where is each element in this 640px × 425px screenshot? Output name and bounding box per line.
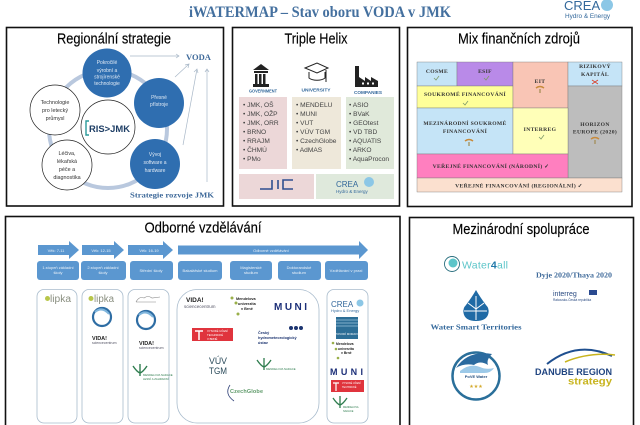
column: higher education: sciencecentrum: [184, 304, 216, 309]
column: higher education: TGM: [209, 366, 227, 376]
label: COMPANIES: COMPANIES: [354, 90, 383, 96]
list: companies: • AquaProcon: [349, 156, 389, 163]
arrows: age groups: Odborné vzdělávání: [253, 248, 290, 253]
icon: factory: [355, 66, 378, 87]
boxes: study levels: školy: [53, 270, 63, 275]
logo: PoVE Water: [452, 352, 500, 400]
arrows to VODA: [130, 54, 209, 182]
funding labels: COSME: [426, 69, 448, 75]
column: 7-11: [37, 290, 77, 423]
circle: Vývoj software a hardware: software a: [143, 160, 167, 166]
label: VODA: VODA: [186, 52, 212, 62]
list: university: • CzechGlobe: [296, 138, 337, 145]
circle: Vývoj software a hardware: [130, 139, 180, 189]
circle: Léčiva, lékařská péče a diagnostika: lékařská: [57, 159, 77, 165]
column: 7-11: lipka: [50, 294, 71, 305]
column: practice: Hydro & Energy: [331, 308, 359, 313]
funding labels: ESIF: [478, 69, 492, 75]
circle: RIS JMK: [81, 100, 135, 154]
funding labels: FINANCOVÁNÍ: [443, 127, 487, 135]
list: university: [292, 97, 341, 169]
logo: PoVE Water: PoVE Water: [465, 374, 488, 379]
column: practice: univerzita: [338, 347, 354, 351]
circle: Vývoj software a hardware: Vývoj: [149, 152, 161, 158]
arrows: age groups: Věk: 16-19: [139, 248, 159, 253]
column: higher education: Český: [258, 330, 270, 335]
column: practice: MUNI: [330, 367, 363, 377]
circle: Léčiva, lékařská péče a diagnostika: Léčiva,: [58, 151, 76, 157]
circle: Pokročilé výrobní a strojírenské technologie: strojírenské: [94, 74, 120, 80]
boxes: study levels: Vzdělávání v praxi: [330, 268, 362, 273]
logo: CREA Hydro & Energy: [564, 0, 613, 20]
logo: PoVE Water: ★★★: [469, 384, 483, 390]
logo box: JIC: [239, 174, 314, 199]
label: Strategie rozvoje JMK: Strategie rozvoje JMK: [130, 192, 214, 200]
column: 16-19: VIDA!: [139, 341, 154, 347]
circle: Pokročilé výrobní a strojírenské technologie: technologie: [94, 81, 120, 87]
panel: Mix finančních zdrojů: [408, 28, 632, 206]
circle: Přesné přístroje: [134, 78, 184, 128]
column: practice: VYSOKÉ UČENÍ: [342, 382, 361, 385]
column: higher education: MUNI: [274, 302, 307, 313]
logo: Danube Region Strategy: DANUBE REGION: [535, 367, 612, 377]
icon: government building: [253, 64, 269, 87]
list: government: • BRNO: [243, 129, 266, 136]
column: higher education: MENDELOVA NADACE: [266, 367, 296, 371]
column: 16-19: MENDELOVA NADACE: [143, 373, 173, 377]
logo box: CREA: CREA: [336, 180, 359, 189]
logo: Interreg: interreg: [553, 291, 577, 298]
column: practice: NADACE: [343, 410, 354, 413]
list: government: • PMo: [243, 156, 261, 163]
boxes: study levels: 1.stupeň základní: [42, 265, 75, 270]
label: Dyje 2020/Thaya 2020: Dyje 2020/Thaya 2020: [536, 272, 612, 280]
list: government: • JMK, OŽP: [243, 109, 278, 118]
list: companies: • AQUATIS: [349, 138, 382, 145]
boxes: study levels: studium: [244, 270, 259, 275]
circle: Technologie pro letecký průmysl: průmysl: [46, 115, 64, 122]
circle: Přesné přístroje: přístroje: [150, 102, 168, 108]
column: 16-19: [128, 290, 173, 423]
list: companies: • GEOtest: [349, 120, 379, 127]
logo: Danube Region Strategy: strategy: [568, 376, 612, 388]
column: higher education: ústav: [258, 341, 269, 345]
circle: Vývoj software a hardware: hardware: [145, 168, 166, 174]
funding mix grid: [417, 62, 622, 192]
list: companies: • VD TBD: [349, 129, 377, 136]
logo: Water Smart Territories: Water Smart Territories: [430, 322, 522, 332]
column: higher education: V BRNĚ: [207, 336, 218, 341]
logo box: CREA: Hydro & Energy: [336, 189, 369, 194]
logo: Water4all: Water4all: [462, 260, 508, 272]
column: higher education: [177, 290, 319, 423]
column: practice: MENDELOVA: [343, 406, 359, 409]
column: higher education: VYSOKÉ UČENÍ: [207, 328, 228, 333]
list: university: • VÚV TGM: [296, 127, 330, 136]
circle: Technologie pro letecký průmysl: [30, 85, 80, 135]
title: iWATERMAP – Stav oboru VODA v JMK: [189, 4, 451, 21]
funding labels: EIT: [535, 79, 545, 85]
funding labels: SOUKROMÉ FINANCOVÁNÍ: [424, 90, 506, 98]
arrows: age groups: Věk: 12-15: [91, 248, 111, 253]
list: government: • ČHMÚ: [243, 145, 267, 154]
funding labels: EUROPE (2020): [573, 128, 617, 136]
heading: Regionální strategie: [57, 30, 171, 48]
column: practice: TECHNICKÉ: [342, 386, 357, 389]
column: higher education: Mendelova: [236, 297, 257, 301]
column: higher education: v Brně: [241, 307, 253, 311]
panel: Mezinárodní spolupráce: [410, 218, 634, 425]
logo: Interreg: Rakousko-Česká republika: [553, 297, 591, 302]
boxes: study levels: Magisterské: [240, 265, 263, 270]
circle: Léčiva, lékařská péče a diagnostika: diagnostika: [53, 175, 81, 181]
boxes: study levels: [37, 261, 368, 280]
status marks: [434, 76, 599, 146]
column: higher education: univerzita: [238, 302, 257, 306]
panel: Triple Helix: [232, 28, 400, 206]
funding labels: [423, 62, 617, 190]
list: government: [239, 97, 287, 169]
boxes: study levels: školy: [98, 270, 108, 275]
column: practice: v Brně: [341, 351, 352, 355]
list: government: • JMK, ORR: [243, 120, 279, 127]
column: higher education: VIDA!: [186, 297, 204, 304]
circle: Technologie pro letecký průmysl: Technologie: [41, 100, 69, 106]
column: higher education: TECHNICKÉ: [207, 332, 223, 337]
logo: Water Smart Territories: [430, 290, 522, 332]
funding labels: KAPITÁL: [581, 70, 609, 78]
column: practice: POVODÍ MORAVY: [335, 332, 359, 336]
panel: Odborné vzdělávání: [6, 216, 400, 425]
column: 12-15: [82, 290, 123, 423]
list: companies: • ARKO: [349, 147, 371, 154]
column: practice: CREA: [331, 300, 354, 309]
circle: Technologie pro letecký průmysl: pro letecký: [42, 108, 68, 114]
arrows: age groups: [38, 241, 368, 259]
funding labels: HORIZON: [580, 122, 610, 128]
icon: graduation cap: [305, 63, 328, 82]
funding labels: VEŘEJNÉ FINANCOVÁNÍ (NÁRODNÍ) ✓: [433, 162, 549, 170]
logo box: JIC: JIC: [275, 195, 277, 197]
logo box: CREA: [316, 174, 394, 199]
logo: Water4all: [444, 256, 508, 272]
panel: Regionální strategie: [6, 28, 224, 206]
column: 12-15: VIDA!: [92, 336, 107, 342]
heading: Mix finančních zdrojů: [458, 30, 580, 48]
heading: Odborné vzdělávání: [144, 220, 262, 236]
logo: Danube Region Strategy: [535, 350, 615, 388]
list: companies: [346, 97, 394, 169]
circle: Přesné přístroje: Přesné: [151, 95, 167, 101]
funding labels: INTERREG: [524, 127, 557, 133]
heading: Triple Helix: [284, 30, 348, 48]
list: companies: • BVaK: [349, 111, 370, 118]
column: higher education: VÚV: [209, 356, 227, 366]
circle: RIS JMK: RIS>JMK: [89, 124, 130, 135]
funding labels: RIZIKOVÝ: [579, 62, 611, 70]
list: government: • RRAJM: [243, 138, 270, 145]
boxes: study levels: 2.stupeň základní: [87, 265, 120, 270]
list: university: • MENDELU: [296, 102, 333, 109]
logo: CREA Hydro & Energy: Hydro & Energy: [565, 13, 611, 20]
list: university: • MUNI: [296, 111, 317, 118]
ring: [49, 70, 167, 188]
column: higher education: hydrometeorologický: [258, 336, 297, 340]
circle: Léčiva, lékařská péče a diagnostika: [42, 140, 92, 190]
circle: Pokročilé výrobní a strojírenské technologie: výrobní a: [97, 68, 117, 74]
label: UNIVERSITY: UNIVERSITY: [302, 88, 331, 94]
boxes: study levels: Střední školy: [139, 268, 163, 273]
arrows: age groups: Věk: 7-11: [48, 248, 65, 253]
list: university: • AdMAS: [296, 147, 323, 154]
boxes: study levels: Bakalářské studium: [183, 268, 218, 273]
circle: Léčiva, lékařská péče a diagnostika: péče a: [59, 167, 75, 173]
column: higher education: CzechGlobe: [230, 389, 263, 395]
column: 12-15: sciencecentrum: [92, 341, 117, 345]
boxes: study levels: studium: [292, 270, 307, 275]
funding labels: MEZINÁRODNÍ SOUKROMÉ: [423, 119, 507, 127]
list: university: • VUT: [296, 120, 313, 127]
column: 16-19: LESNÍ A ZAHRADNÍ: [143, 377, 169, 381]
column: 16-19: sciencecentrum: [139, 346, 164, 350]
list: companies: • ASIO: [349, 102, 369, 109]
column: 12-15: lipka: [94, 294, 114, 305]
list: government: • JMK, OŠ: [243, 100, 274, 109]
circle: Pokročilé výrobní a strojírenské technologie: Pokročilé: [97, 60, 117, 66]
funding labels: VEŘEJNÉ FINANCOVÁNÍ (REGIONÁLNÍ) ✓: [455, 182, 583, 190]
circle: Pokročilé výrobní a strojírenské technologie: [82, 48, 132, 98]
label: GOVERNMENT: GOVERNMENT: [249, 88, 277, 94]
column: practice: [327, 290, 368, 423]
boxes: study levels: Doktorandské: [287, 265, 312, 270]
heading: Mezinárodní spolupráce: [452, 221, 590, 238]
logo: Interreg: [553, 290, 597, 302]
column: practice: Mendelova: [336, 342, 354, 346]
